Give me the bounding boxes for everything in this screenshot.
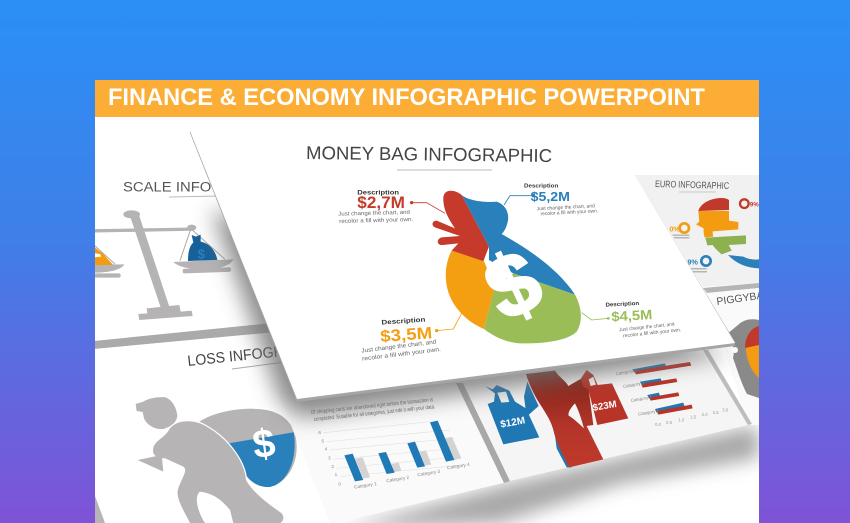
bar chart: 3.0 [722,407,729,412]
callout: green $4,5M: Just change the chart, and [619,321,675,333]
bar chart: 1.0 [678,417,685,422]
dollar icon: $ [250,421,278,468]
panel: shopper slide [468,362,748,481]
callout: green $4,5M: Description [605,301,640,309]
green segment [484,273,581,343]
panel: piggybank slide [708,288,759,425]
scale icon [94,210,233,320]
panel: euro slide [635,175,760,287]
main slide shadow [212,210,730,418]
euro heading: EURO INFOGRAPHIC [655,179,729,192]
callout: blue $5,2M: recolor a fill with your own. [540,208,598,217]
divider: chart and shopper [456,383,510,483]
callout: green $4,5M [582,301,682,339]
euro callouts: 0% [669,224,680,233]
callout: orange $3,5M: Description [381,317,426,327]
panel: column chart slide: completed. Suitable for all categories, just edit it with your data. [314,404,436,423]
callout: orange $3,5M: Just change the chart, and [361,339,437,355]
column chart: 0 [338,481,341,486]
piggy chart [746,326,759,378]
column chart: 6 [318,430,321,435]
bar chart: 0.0 [655,422,662,427]
callout: orange $3,5M: $3,5M [380,323,433,346]
callout: blue $5,2M: Just change the chart, and [536,203,595,212]
divider: shopper and piggy [703,350,752,425]
callout: orange $3,5M: recolor a fill with your own. [362,347,442,363]
header bar [95,80,759,117]
callout: green $4,5M: recolor a fill with your own. [623,327,682,339]
column chart: Category 3 [417,469,441,477]
bar chart: 0.5 [666,420,673,425]
column chart: 5 [321,438,324,443]
euro callouts [669,199,759,272]
red segment [433,191,489,261]
euro symbol [696,198,760,268]
slide stack area [94,117,779,523]
piggybank heading: PIGGYBANK [716,287,779,308]
callout: blue $5,2M [504,183,598,217]
scale icon: $ [198,247,206,262]
column chart: 1 [335,472,338,477]
column chart: 3 [328,455,331,460]
bar chart: Category 2 [630,394,653,403]
callout: blue $5,2M: Description [524,183,559,189]
red shopping bag: $23M [592,399,618,414]
divider: scale and loss [94,323,277,349]
bar chart: 2.0 [702,412,708,417]
bar chart [615,362,729,427]
scale heading: SCALE INFOGRAPHIC [123,180,279,194]
loss heading: LOSS INFOGRAPHIC [187,338,328,370]
shadow under shopper slide [340,427,759,523]
callout: orange $3,5M [361,313,462,363]
bar chart: 1.5 [690,415,697,420]
callout: red $2,7M: Description [357,189,399,196]
bar chart: 2.5 [713,410,719,415]
scale money bag [188,235,217,261]
column chart [318,421,470,490]
euro callouts: 9% [687,258,698,267]
column chart: 2 [331,464,334,469]
bar chart: Category 4 [615,368,638,376]
callout: green $4,5M: $4,5M [611,307,653,324]
callout: red $2,7M [338,189,445,225]
column chart: Category 1 [354,481,377,490]
piggy icon [727,319,759,398]
callout: blue $5,2M: $5,2M [531,189,570,204]
column chart: Category 4 [447,462,470,470]
bar chart: Category 3 [623,380,645,389]
blue shopping bag [485,385,539,444]
blue segment [462,195,575,295]
slide heading: MONEY BAG INFOGRAPHIC [306,142,552,166]
panel: scale slide [95,182,233,320]
header title: FINANCE & ECONOMY INFOGRAPHIC POWERPOINT [108,84,705,111]
callout: red $2,7M: Just change the chart, and [338,210,410,218]
callout: red $2,7M: $2,7M [357,193,405,212]
euro callouts: 9% [750,202,759,208]
panel: main money bag slide [190,117,735,402]
dollar sign: $ [470,230,556,340]
panel: loss slide [95,333,297,523]
blue shopping bag: $12M [500,415,526,431]
divider: euro and piggy [703,283,759,293]
money bag chart [433,191,581,343]
column chart: Category 2 [386,475,410,483]
callout: red $2,7M: recolor a fill with your own. [339,217,414,225]
bar chart: Category 1 [638,408,660,417]
orange segment [446,251,495,329]
column chart: 4 [325,447,328,452]
red shopping bag [581,370,628,425]
panel: column chart slide [291,398,504,516]
column chart caption: Of shopping carts are abandoned right before the transaction is [311,397,434,416]
blue and red figure [524,371,603,467]
loss man with bag [94,397,297,523]
